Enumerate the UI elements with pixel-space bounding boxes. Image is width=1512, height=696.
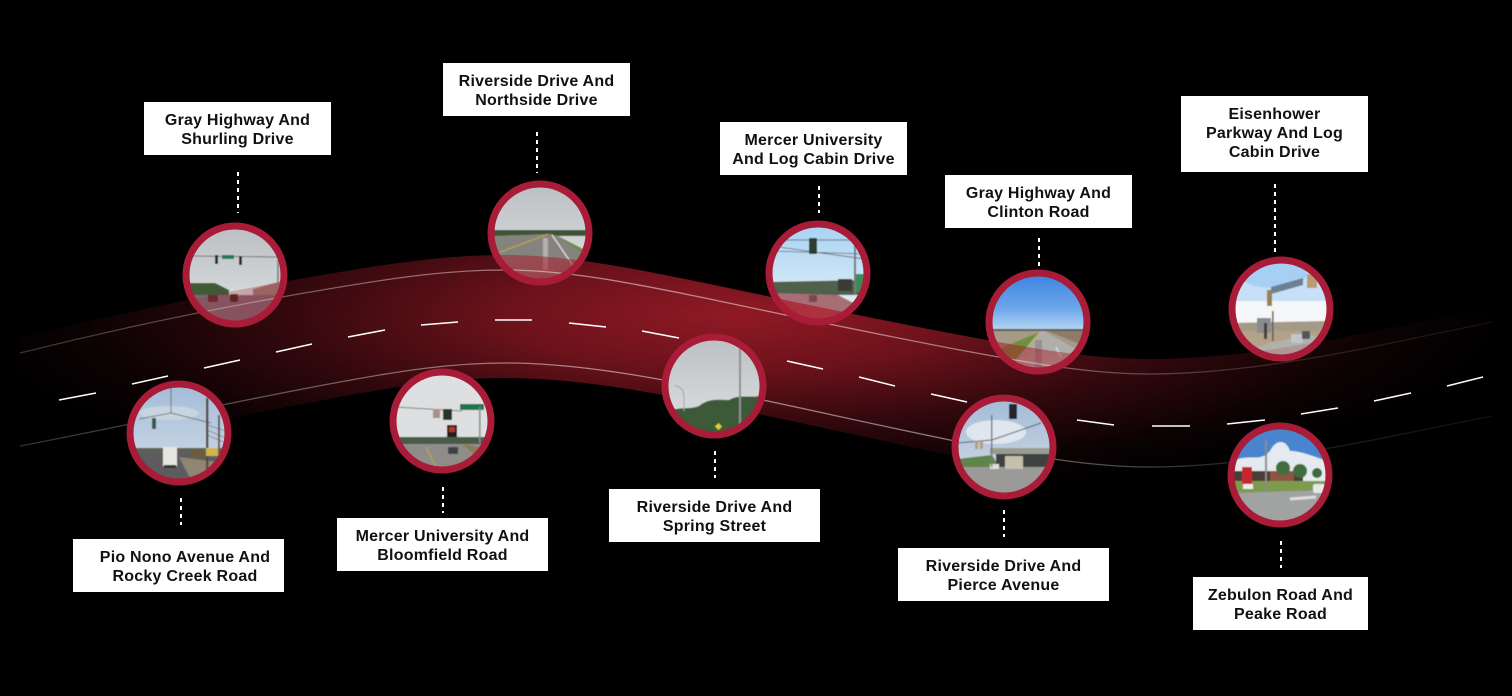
label: Eisenhower Parkway And Log Cabin Drive: Cabin Drive — [1229, 144, 1320, 161]
label: Zebulon Road And Peake Road: Zebulon Road And — [1208, 587, 1353, 604]
label: Eisenhower Parkway And Log Cabin Drive — [1181, 96, 1368, 172]
label: Gray Highway And Shurling Drive: Shurling Drive — [181, 131, 294, 148]
label: Pio Nono Avenue And Rocky Creek Road: Rocky Creek Road — [113, 568, 257, 585]
photo: Zebulon Road and Peake Road — [1233, 428, 1327, 522]
photo: Gray Highway and Shurling Drive — [188, 228, 282, 322]
road centre dashes — [59, 320, 1483, 426]
label: Gray Highway And Clinton Road — [945, 175, 1132, 228]
road surface — [20, 255, 1492, 482]
label: Mercer University And Bloomfield Road — [337, 518, 548, 571]
road edge: lower — [20, 363, 1492, 467]
photo: Gray Highway and Clinton Road — [991, 275, 1085, 369]
label: Eisenhower Parkway And Log Cabin Drive: Eisenhower — [1228, 106, 1321, 123]
label: Riverside Drive And Northside Drive: Northside Drive — [475, 92, 598, 109]
road band — [20, 255, 1492, 482]
label: Riverside Drive And Pierce Avenue — [898, 548, 1109, 601]
label: Riverside Drive And Northside Drive: Riverside Drive And — [459, 73, 614, 90]
label: Gray Highway And Shurling Drive: Gray Highway And — [165, 112, 310, 129]
label: Riverside Drive And Spring Street — [609, 489, 820, 542]
ring: top row circles — [186, 184, 1330, 371]
label: Riverside Drive And Spring Street: Spring Street — [663, 518, 767, 535]
photo: Mercer University and Log Cabin Drive — [771, 226, 865, 320]
label: Pio Nono Avenue And Rocky Creek Road — [73, 539, 284, 592]
ring: bottom row circles — [130, 337, 1329, 524]
label: Zebulon Road And Peake Road — [1193, 577, 1368, 630]
photo: Riverside Drive and Spring Street — [667, 339, 761, 433]
label: Pio Nono Avenue And Rocky Creek Road: Pio Nono Avenue And — [100, 549, 270, 566]
road edge: upper — [20, 270, 1492, 374]
photo: Riverside Drive and Northside Drive — [493, 186, 587, 280]
label: Gray Highway And Clinton Road: Gray Highway And — [966, 185, 1111, 202]
label: Zebulon Road And Peake Road: Peake Road — [1234, 606, 1327, 623]
label: Mercer University And Bloomfield Road: Bloomfield Road — [377, 547, 508, 564]
label: Gray Highway And Clinton Road: Clinton Road — [987, 204, 1090, 221]
label: Gray Highway And Shurling Drive — [144, 102, 331, 155]
label: Riverside Drive And Spring Street: Riverside Drive And — [637, 499, 792, 516]
photo: Mercer University and Bloomfield Road — [395, 374, 489, 468]
label: Mercer University And Log Cabin Drive — [720, 122, 907, 175]
photo: Eisenhower Parkway and Log Cabin Drive — [1234, 260, 1328, 356]
connector: dotted lines — [181, 132, 1281, 568]
label: Mercer University And Log Cabin Drive: And Log Cabin Drive — [732, 151, 895, 168]
photo: Riverside Drive and Pierce Avenue — [957, 400, 1051, 494]
label: Mercer University And Log Cabin Drive: Mercer University — [744, 132, 883, 149]
label: Riverside Drive And Pierce Avenue: Riverside Drive And — [926, 558, 1081, 575]
photo: Pio Nono Avenue and Rocky Creek Road — [132, 386, 226, 480]
label: Riverside Drive And Northside Drive — [443, 63, 630, 116]
label: Mercer University And Bloomfield Road: Mercer University And — [356, 528, 529, 545]
label: Riverside Drive And Pierce Avenue: Pierce Avenue — [948, 577, 1059, 594]
label: Eisenhower Parkway And Log Cabin Drive: Parkway And Log — [1206, 125, 1343, 142]
